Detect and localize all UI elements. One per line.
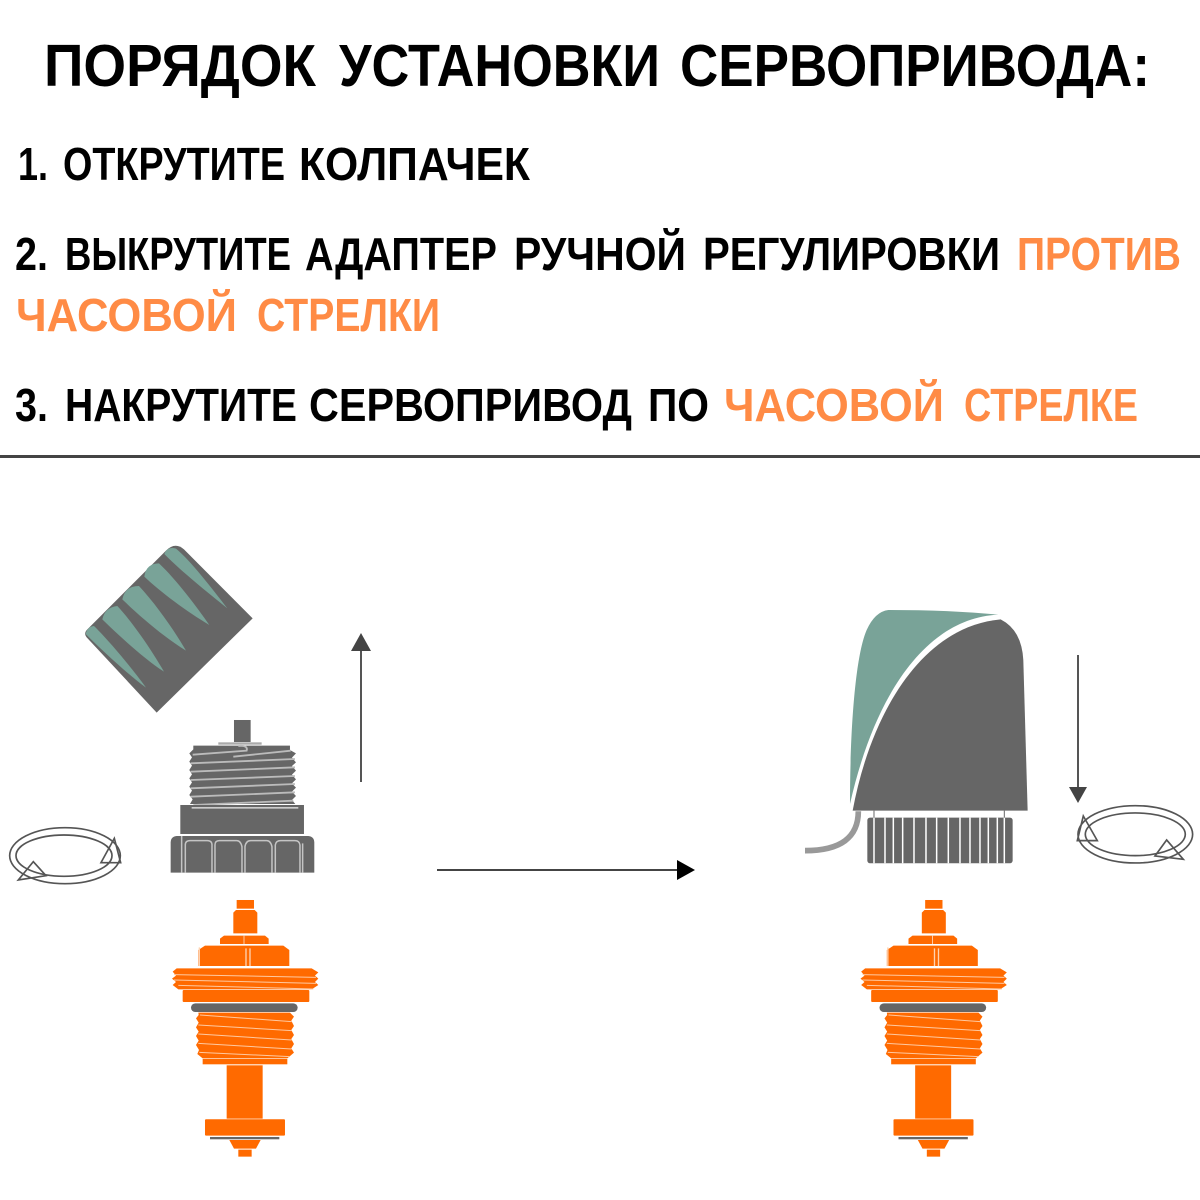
step 3 text	[15, 379, 1138, 431]
step 3 text: НАКРУТИТЕ	[65, 379, 297, 431]
arrow: up	[351, 633, 371, 782]
adapter stem	[234, 720, 251, 742]
adapter thread	[189, 746, 296, 805]
arrow: to the next step	[437, 860, 695, 880]
step 2 text: ЧАСОВОЙ	[16, 289, 237, 341]
icon: manual adjustment adapter	[171, 720, 314, 873]
step 2 text: РЕГУЛИРОВКИ	[703, 228, 1000, 280]
step 3 text: 3.	[15, 379, 48, 431]
icon: right rotation arrow	[1077, 806, 1193, 863]
icon: servo actuator	[805, 610, 1028, 863]
actuator ribbed grip	[867, 811, 1013, 863]
arrow: down	[1069, 655, 1087, 803]
step 3 text: ПО	[648, 379, 709, 431]
title	[44, 33, 1150, 99]
step 1 text: КОЛПАЧЕК	[299, 138, 531, 190]
icon: removed cap	[85, 546, 253, 713]
adapter nut	[171, 836, 314, 873]
step 2 text: 2.	[15, 228, 48, 280]
icon: left rotation arrow	[10, 828, 121, 884]
title: ПОРЯДОК	[44, 33, 317, 99]
title: СЕРВОПРИВОДА:	[680, 33, 1150, 99]
icon: orange valve, left	[172, 900, 318, 1157]
step 1 text: 1.	[18, 138, 48, 190]
step 1 text	[18, 138, 531, 190]
step 2 text	[15, 228, 1181, 341]
actuator green side	[850, 610, 998, 804]
step 3 text: ЧАСОВОЙ	[724, 379, 944, 431]
step 2 text: АДАПТЕР	[305, 228, 497, 280]
adapter collar	[180, 805, 304, 834]
title: УСТАНОВКИ	[339, 33, 660, 99]
step 2 text: ВЫКРУТИТЕ	[65, 228, 291, 280]
icon: orange valve, right	[860, 900, 1007, 1157]
step 2 text: СТРЕЛКИ	[257, 289, 440, 341]
actuator grey body	[853, 619, 1028, 811]
step 2 text: РУЧНОЙ	[514, 228, 686, 280]
step 3 text: СТРЕЛКЕ	[964, 379, 1138, 431]
step 1 text: ОТКРУТИТЕ	[63, 138, 285, 190]
actuator cable	[805, 811, 858, 851]
step 3 text: СЕРВОПРИВОД	[309, 379, 632, 431]
